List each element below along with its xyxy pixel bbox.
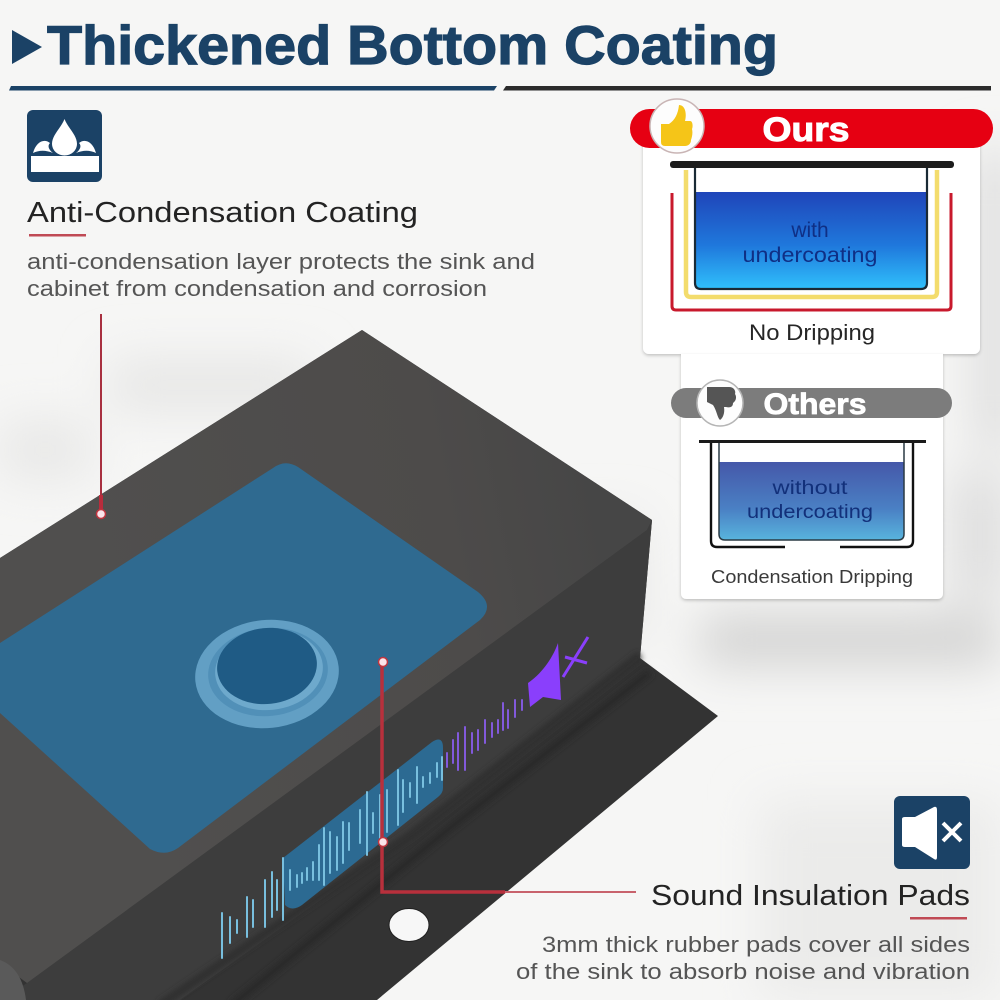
ours sink outline — [695, 166, 927, 289]
others water — [719, 462, 904, 540]
ours rim — [670, 161, 954, 168]
ours water — [695, 192, 927, 289]
sink side wall — [0, 520, 652, 1000]
wave: purple section — [447, 700, 522, 770]
heading underline — [29, 234, 86, 236]
title arrow — [12, 30, 42, 64]
icon: thumbs up — [650, 99, 704, 153]
ours caption: No Dripping — [749, 320, 875, 345]
heading: anti-condensation coating: Anti-Condensation Coating — [27, 197, 418, 229]
description: anti-condensation — [27, 249, 535, 301]
description: anti-condensation: anti-condensation layer protects the sink and — [27, 249, 535, 274]
flange crease — [232, 672, 650, 1000]
yellow coating layer — [686, 170, 937, 297]
icon: mute speaker — [894, 796, 970, 869]
icon: purple muted speaker — [528, 637, 588, 707]
icon: thumbs down — [697, 380, 743, 426]
others outer shell — [711, 441, 913, 547]
flange hole — [389, 908, 429, 942]
blue coating panel — [0, 463, 487, 853]
ours water label: with — [790, 219, 829, 242]
description: sound insulation: of the sink to absorb noise and vibration — [516, 959, 970, 984]
others water label: without — [771, 477, 848, 499]
red coating layer — [672, 193, 951, 310]
title — [12, 14, 778, 76]
others water label — [747, 477, 873, 523]
others card — [681, 354, 943, 599]
ours label: Ours — [762, 111, 850, 149]
sink underside — [0, 330, 718, 1000]
heading: sound insulation pads: Sound Insulation Pads — [651, 880, 970, 912]
description: anti-condensation: cabinet from condensation and corrosion — [27, 276, 487, 301]
others rim — [699, 440, 926, 443]
title rule — [9, 86, 991, 90]
title text: Thickened Bottom Coating — [47, 14, 778, 76]
description: sound insulation: 3mm thick rubber pads cover all sides — [542, 932, 970, 957]
ours water label — [742, 219, 878, 267]
others caption: Condensation Dripping — [711, 566, 913, 587]
sound insulation pad — [283, 740, 443, 908]
drain hole — [190, 613, 344, 735]
sink base and flange — [0, 330, 718, 1000]
sink bottom face — [0, 330, 652, 983]
leader: pads — [378, 658, 636, 892]
others label: Others — [764, 388, 866, 421]
sound wave — [222, 700, 522, 958]
icon: condensation drop — [27, 110, 102, 182]
panel: ours — [630, 99, 993, 354]
ours card — [643, 130, 980, 354]
others sink outline — [719, 441, 904, 540]
ours banner — [630, 109, 993, 148]
corner lower-left — [0, 960, 26, 1000]
others banner — [671, 388, 952, 418]
others water label: undercoating — [747, 501, 873, 523]
wave: blue section — [222, 757, 442, 958]
heading underline — [910, 917, 967, 920]
panel: others — [671, 354, 952, 599]
leader: coating — [96, 314, 106, 518]
ours water label: undercoating — [742, 244, 878, 267]
description: sound insulation — [516, 932, 970, 984]
